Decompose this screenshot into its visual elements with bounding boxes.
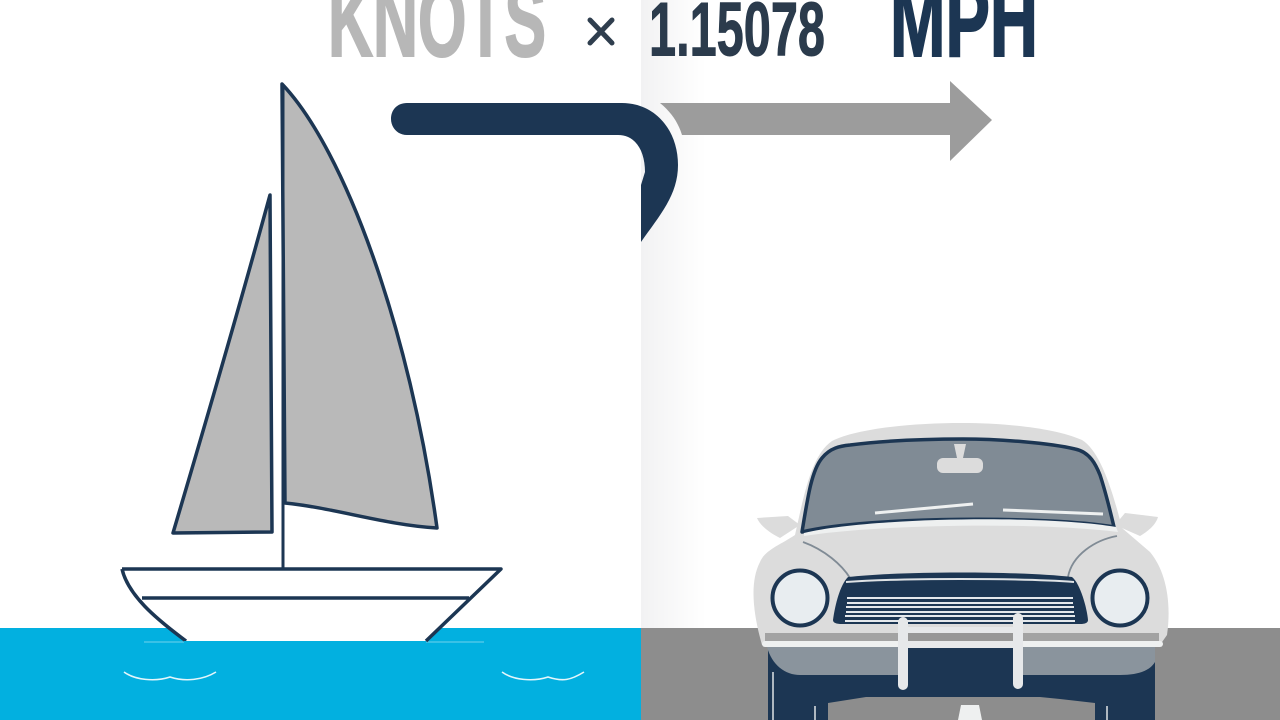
arrow: grey to mph [660,81,992,161]
panel: water [0,628,641,720]
multiply sign [590,20,612,43]
bumper [762,613,1163,694]
side mirrors [757,516,800,538]
left headlight [772,570,828,626]
curved arrow: dark segment [391,103,678,242]
road dash [958,705,982,720]
fender lines [803,536,1117,578]
jib sail [173,195,272,533]
hood [804,519,1118,536]
panel: right side background [641,0,1280,628]
car body [754,423,1169,645]
tyres and underbody [768,650,1155,720]
panel: road [641,628,1280,720]
windshield [802,439,1114,532]
icon: sailboat [122,84,501,644]
main sail [282,84,437,528]
hull [122,569,501,641]
mast [282,84,284,568]
right headlight [1092,570,1148,626]
grille [833,572,1088,624]
wipers [875,504,1103,514]
icon: car front [754,423,1169,720]
rear-view mirror [954,444,966,458]
